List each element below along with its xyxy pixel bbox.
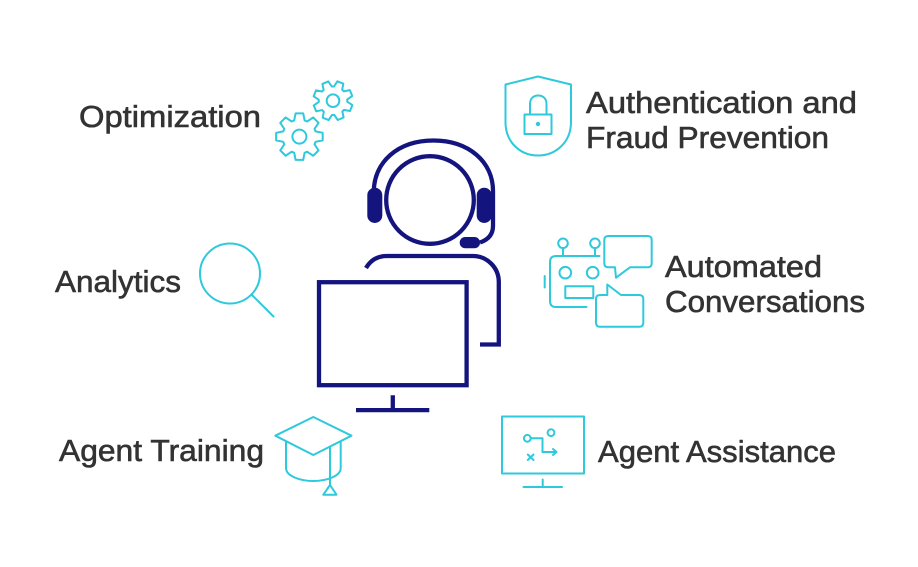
icon: monitor with strategy diagram (502, 416, 584, 487)
label: Authentication and Fraud Prevention: Fraud Prevention (586, 121, 829, 155)
label: Authentication and Fraud Prevention (586, 86, 857, 155)
label: Authentication and Fraud Prevention: Authentication and (586, 86, 857, 120)
shoulders (366, 256, 499, 344)
label: Agent Assistance: Agent Assistance (598, 435, 836, 469)
headset (367, 140, 493, 248)
icon: graduation cap (275, 417, 352, 495)
agent figure (319, 140, 499, 410)
label: Agent Training: Agent Training (59, 434, 264, 468)
icon: robot with speech bubbles (545, 236, 652, 327)
monitor (319, 282, 467, 410)
head (386, 156, 474, 244)
icon: gears (276, 75, 359, 160)
label: Analytics: Analytics (55, 265, 181, 299)
label: Automated Conversations: Conversations (665, 285, 865, 319)
icon: shield with lock (506, 76, 571, 156)
icon: magnifying glass (200, 244, 274, 316)
label: Automated Conversations: Automated (665, 250, 822, 284)
label: Optimization: Optimization (79, 100, 261, 134)
label: Automated Conversations (665, 250, 865, 319)
